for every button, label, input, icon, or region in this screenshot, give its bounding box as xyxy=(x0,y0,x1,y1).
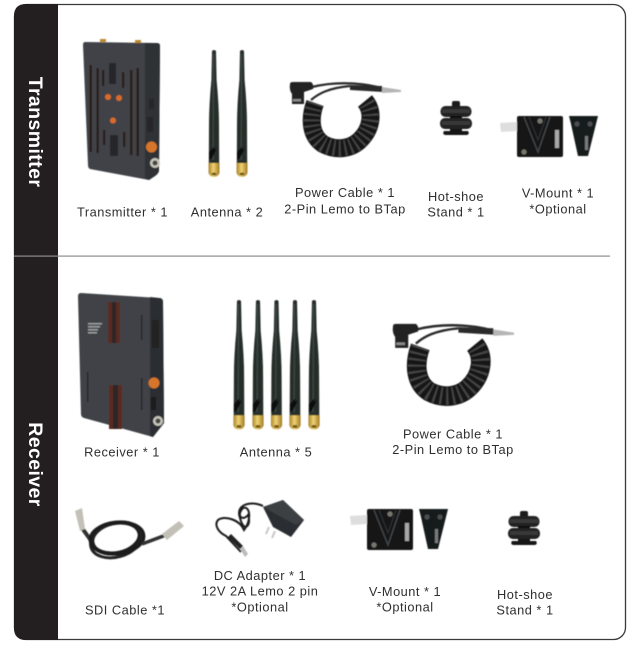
label: Hot-shoe Stand: Hot-shoe xyxy=(497,587,553,602)
icon: power cable xyxy=(393,324,514,396)
label: Power Cable xyxy=(284,185,406,216)
heading: Receiver: Receiver xyxy=(24,422,46,507)
label: Hot-shoe Stand: Stand * 1 xyxy=(496,602,554,618)
panel: receiver contents xyxy=(75,293,554,618)
label: DC Adapter: DC Adapter * 1 xyxy=(214,568,306,583)
label: SDI Cable: SDI Cable *1 xyxy=(85,602,165,618)
label: Hot-shoe Stand: Hot-shoe xyxy=(428,189,484,204)
label: Transmitter: Transmitter * 1 xyxy=(77,204,168,220)
icon: hot-shoe stand xyxy=(508,511,540,545)
icon: DC adapter xyxy=(216,500,304,557)
section divider xyxy=(14,256,610,257)
label: Antenna: Antenna * 2 xyxy=(191,204,263,220)
heading: Transmitter: Transmitter xyxy=(24,77,46,187)
label: DC Adapter: 12V 2A Lemo 2 pin xyxy=(202,584,318,598)
icon: transmitter unit xyxy=(83,39,160,180)
icon: power cable xyxy=(290,82,401,148)
icon: hot-shoe stand xyxy=(440,101,472,135)
label: Power Cable: Power Cable * 1 xyxy=(295,185,395,200)
label: Hot-shoe Stand xyxy=(496,587,554,618)
panel: transmitter contents xyxy=(77,39,598,220)
label: Power Cable: Power Cable * 1 xyxy=(403,426,503,442)
panel: side band xyxy=(14,4,58,640)
label: V-Mount: *Optional xyxy=(529,202,587,216)
icon: V-mount xyxy=(350,509,448,550)
label: Hot-shoe Stand xyxy=(427,189,485,220)
label: Power Cable xyxy=(392,426,514,457)
label: Hot-shoe Stand: Stand * 1 xyxy=(427,204,485,220)
icon: SDI cable xyxy=(75,508,184,564)
label: Antenna: Antenna * 5 xyxy=(240,444,312,460)
label: V-Mount: *Optional xyxy=(376,600,434,614)
label: V-Mount: V-Mount * 1 xyxy=(369,584,441,599)
icon: V-mount xyxy=(500,116,598,157)
label: DC Adapter xyxy=(202,568,318,614)
label: V-Mount xyxy=(522,186,594,216)
label: Receiver: Receiver * 1 xyxy=(84,444,160,460)
label: Power Cable: 2-Pin Lemo to BTap xyxy=(284,202,406,216)
icon: two antennas xyxy=(208,50,248,177)
icon: receiver unit xyxy=(78,293,164,437)
label: V-Mount xyxy=(369,584,441,614)
icon: five antennas xyxy=(233,300,320,430)
label: V-Mount: V-Mount * 1 xyxy=(522,186,594,200)
label: Power Cable: 2-Pin Lemo to BTap xyxy=(392,442,514,457)
label: DC Adapter: *Optional xyxy=(231,600,289,614)
